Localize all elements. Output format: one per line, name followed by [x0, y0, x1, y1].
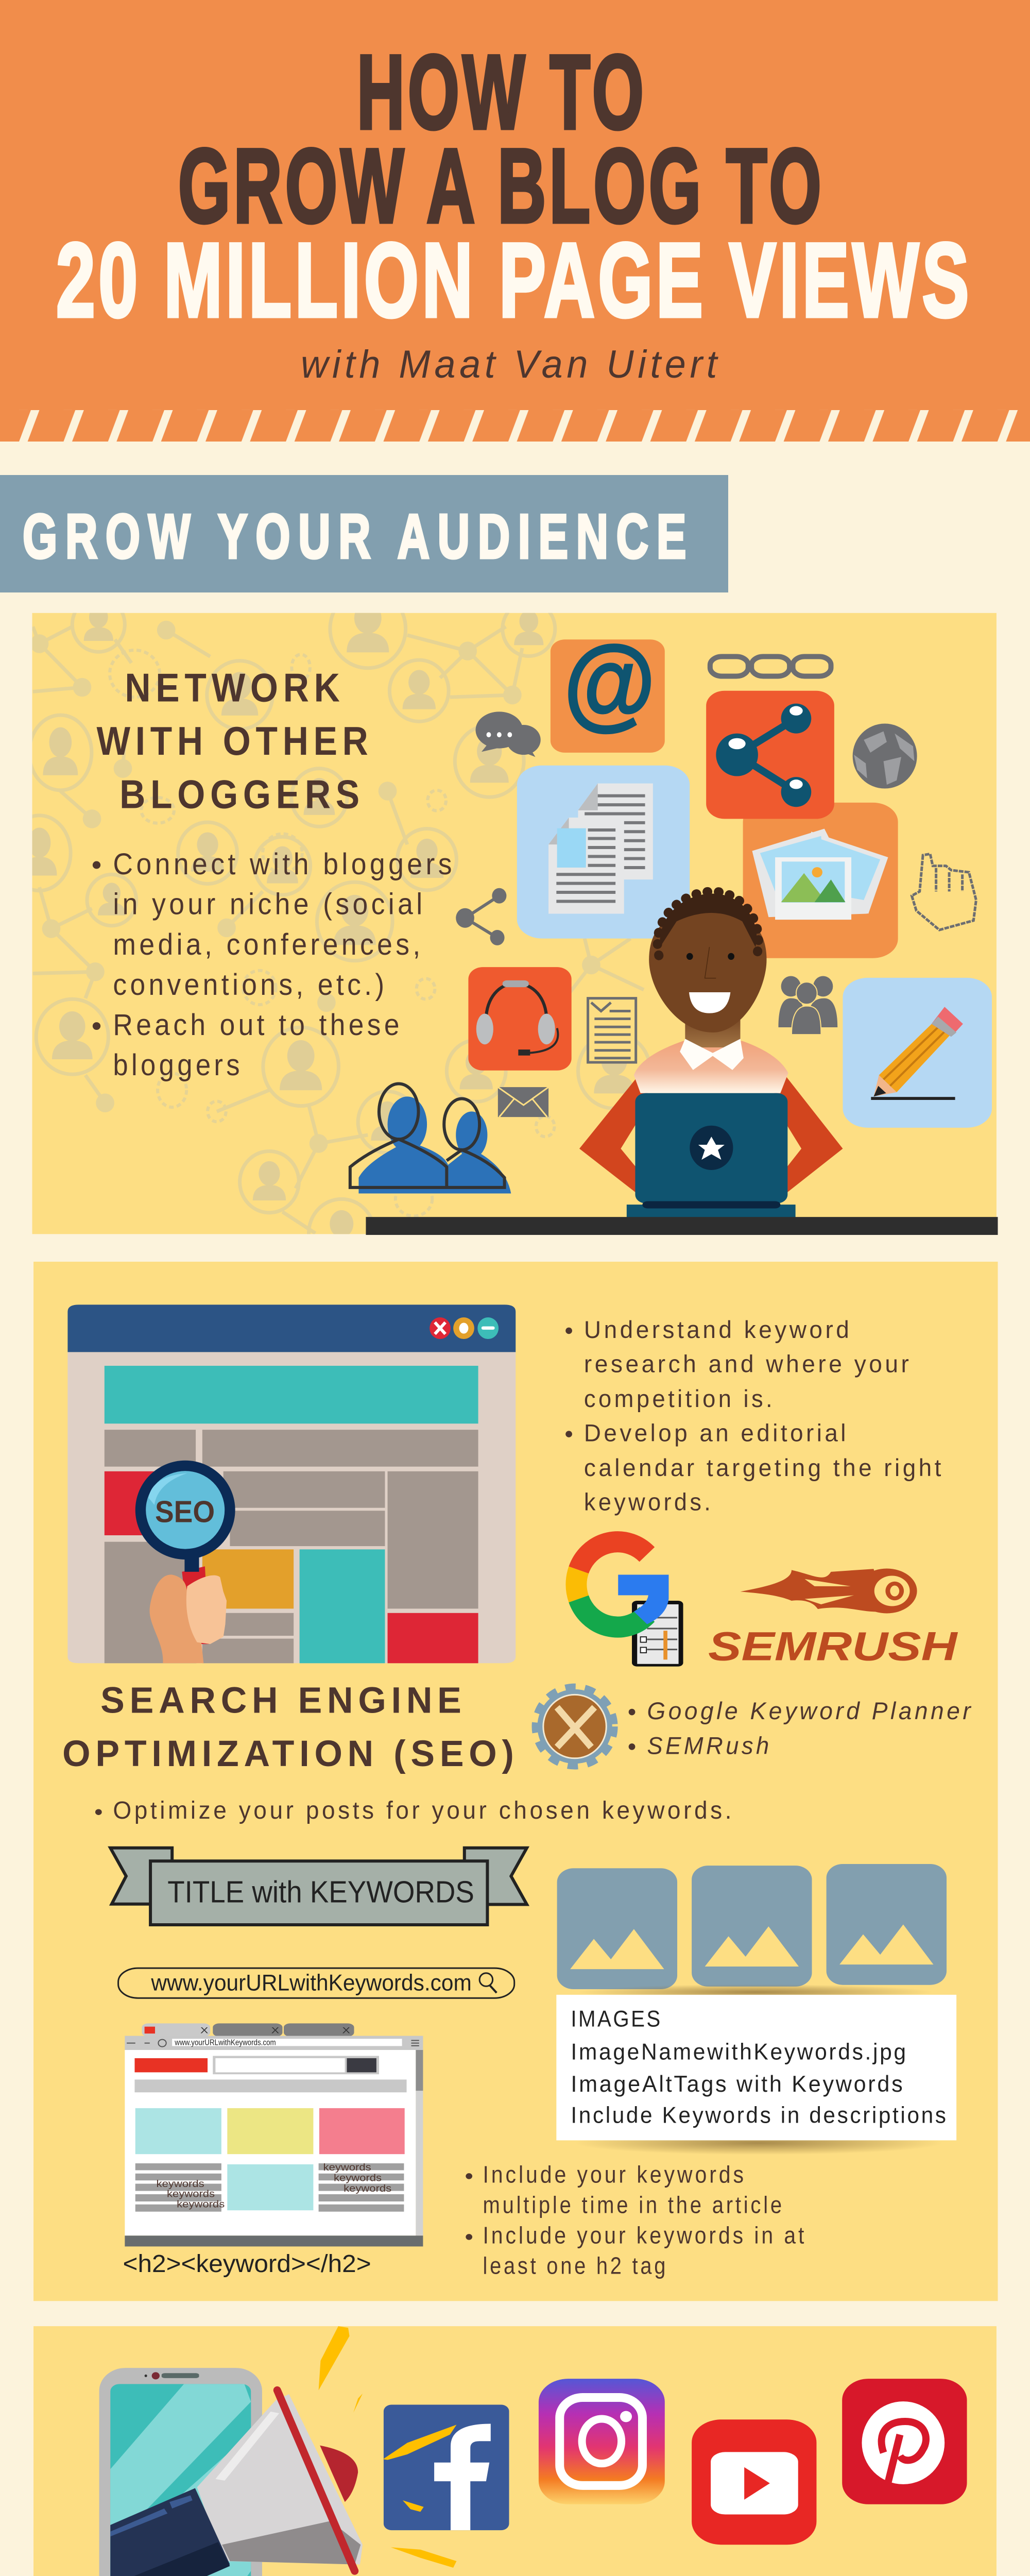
illustration: browser mockup: X [342, 2025, 350, 2035]
banner: grow your audience [0, 475, 728, 592]
illustration: browser mockup [125, 2023, 423, 2246]
illustration: browser mockup: keywords [323, 2162, 371, 2173]
desk [366, 1217, 998, 1235]
icon: share tile [706, 691, 834, 819]
title line: how to: HOW TO [357, 33, 647, 151]
illustration: megaphone [110, 2390, 363, 2576]
url pill: www.yourURLwithKeywords.com [151, 1970, 472, 1995]
icon: instagram [539, 2379, 665, 2504]
icon: checklist [588, 998, 636, 1062]
icon: magnifier with hand: SEO [155, 1495, 215, 1529]
header stripes [19, 410, 1024, 442]
heading: search engine optimization: OPTIMIZATION (SEO) [62, 1733, 519, 1774]
bullet list: networking: bloggers [113, 1048, 243, 1081]
icon: pencil tile [843, 978, 992, 1128]
header band [0, 0, 1030, 442]
icon: pointer hand [912, 854, 976, 930]
url pill [118, 1968, 514, 1998]
network background pattern [32, 613, 650, 1234]
illustration: phone [99, 2368, 262, 2576]
illustration: browser mockup: www.yourURLwithKeywords.com [175, 2038, 276, 2047]
sparks over facebook [383, 2425, 456, 2568]
icon: semrush logo [708, 1569, 958, 1669]
heading: network with other bloggers: NETWORK [125, 665, 345, 710]
icon: magnifier with hand [135, 1461, 235, 1663]
illustration: browser mockup: X [271, 2025, 279, 2035]
illustration: browser mockup: keywords [344, 2183, 391, 2194]
icon: google g [576, 1542, 668, 1627]
ribbon: title with keywords [110, 1848, 527, 1925]
icon: at sign tile [551, 624, 665, 753]
illustration: browser mockup: keywords [177, 2199, 225, 2210]
bullet list: networking: conventions, etc.) [113, 968, 388, 1001]
icon: envelope [498, 1087, 548, 1117]
heading: network with other bloggers: WITH OTHER [96, 719, 373, 764]
bullet list: networking: in your niche (social [113, 887, 426, 921]
bullet list: networking: Reach out to these [113, 1008, 403, 1041]
icon: gear with tools [536, 1687, 614, 1766]
icon: blue people [350, 1083, 511, 1194]
images text box [556, 1984, 956, 2155]
icon: chain [710, 656, 831, 676]
bullet list: networking: media, conferences, [113, 928, 424, 961]
icon: chat bubbles [475, 711, 541, 757]
panel: social media marketing [33, 2326, 997, 2576]
sparks top [319, 2326, 363, 2413]
panel: search engine optimization bottom [33, 1797, 998, 2301]
panel: search engine optimization top [33, 1262, 998, 1819]
icon: globe [853, 724, 917, 789]
heading: network with other bloggers [96, 665, 373, 817]
icon: group of people [778, 976, 837, 1035]
bullet list: keyword research: competition is. [584, 1385, 775, 1412]
h2 keyword caption: <h2><keyword></h2> [123, 2250, 371, 2278]
illustration: browser mockup: X [200, 2025, 208, 2035]
heading: search engine optimization [62, 1680, 519, 1774]
heading: search engine optimization: SEARCH ENGINE [100, 1680, 467, 1721]
image placeholder tiles [557, 1864, 947, 1989]
illustration: man with laptop [579, 891, 843, 1221]
illustration: SEO browser [67, 1304, 516, 1663]
banner heading: GROW YOUR AUDIENCE [23, 501, 694, 571]
bullet list: networking [93, 848, 455, 1081]
icon: photos tile [743, 803, 898, 958]
icon: document tile [517, 766, 690, 939]
icon: at sign tile: @ [563, 624, 656, 739]
illustration: browser mockup: keywords [167, 2189, 215, 2199]
bullet list: keyword research: keywords. [584, 1488, 713, 1516]
subtitle: with Maat Van Uitert [301, 343, 721, 386]
heading: network with other bloggers: BLOGGERS [119, 772, 365, 817]
ribbon: title with keywords: TITLE with KEYWORDS [167, 1875, 474, 1909]
icon: pinterest [842, 2379, 967, 2504]
optimize bullet [95, 1797, 734, 1824]
icon: facebook [384, 2405, 509, 2530]
bullet list: keywords in article [466, 2162, 806, 2279]
images text box: IMAGES [571, 2006, 662, 2031]
icon: clipboard [632, 1601, 683, 1667]
illustration: browser mockup: keywords [334, 2173, 382, 2183]
illustration: browser mockup: keywords [157, 2179, 204, 2189]
icon: headset tile [468, 967, 572, 1071]
bullet list: networking: Connect with bloggers [113, 848, 455, 881]
tool list: SEMRush [647, 1732, 772, 1759]
icon: youtube [692, 2419, 816, 2545]
bullet list: keywords in article: least one h2 tag [483, 2252, 668, 2279]
tool list [629, 1697, 973, 1759]
panel: network with other bloggers [32, 613, 998, 1235]
icon: small share [456, 888, 506, 945]
bullet list: keyword research [565, 1316, 944, 1516]
